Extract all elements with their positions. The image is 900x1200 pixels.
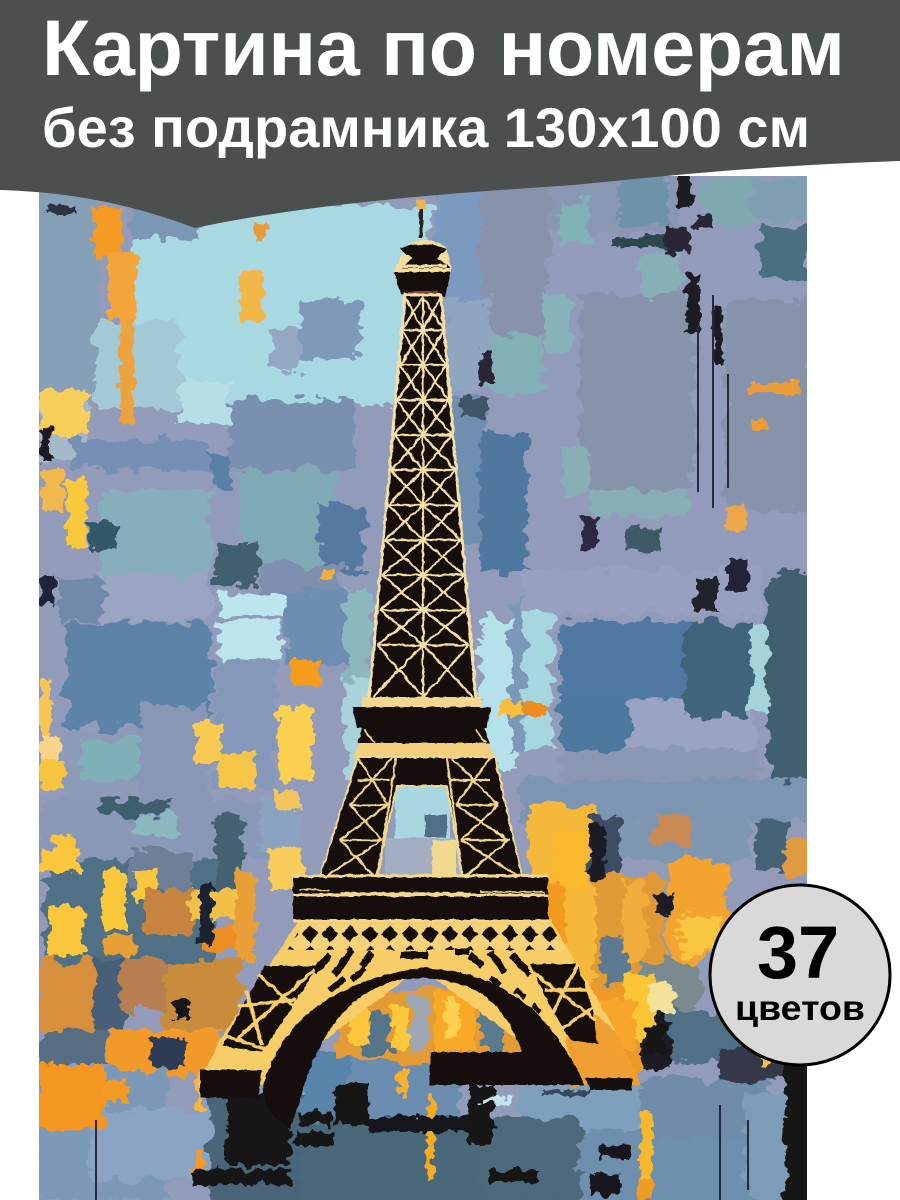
tower middle legs <box>320 757 522 876</box>
title: Картина по номерам <box>42 3 845 92</box>
right leg lattice <box>530 964 598 1044</box>
inside arch <box>335 990 525 1060</box>
orange, yellow and dark accent strokes <box>39 176 800 1200</box>
tower first platform <box>293 876 552 922</box>
mid left <box>40 400 85 460</box>
badge label: цветов <box>735 989 865 1028</box>
badge: colour count <box>710 885 890 1065</box>
tower spire and top <box>393 200 452 297</box>
tower second platform <box>352 697 496 758</box>
Eiffel Tower <box>197 200 640 1130</box>
painting background large brush areas <box>20 160 820 1200</box>
tower upper shaft <box>369 295 476 700</box>
header banner <box>0 0 900 228</box>
lower right <box>520 780 810 820</box>
gold body <box>197 922 640 1085</box>
dark strokes <box>678 176 692 208</box>
lattice band <box>288 924 566 950</box>
left leg lattice <box>222 966 318 1052</box>
orange right foot <box>565 1010 640 1085</box>
lower band <box>39 800 269 860</box>
tower lower arch and legs <box>197 922 640 1130</box>
view through middle arch <box>385 785 460 878</box>
thin dark vertical lines <box>96 295 748 1200</box>
black arch <box>262 968 585 1130</box>
subtitle: без подрамника 130х100 см <box>42 96 810 159</box>
painting: Eiffel Tower <box>20 160 820 1200</box>
top left <box>39 192 105 393</box>
top right <box>435 175 485 300</box>
badge number: 37 <box>757 911 839 994</box>
